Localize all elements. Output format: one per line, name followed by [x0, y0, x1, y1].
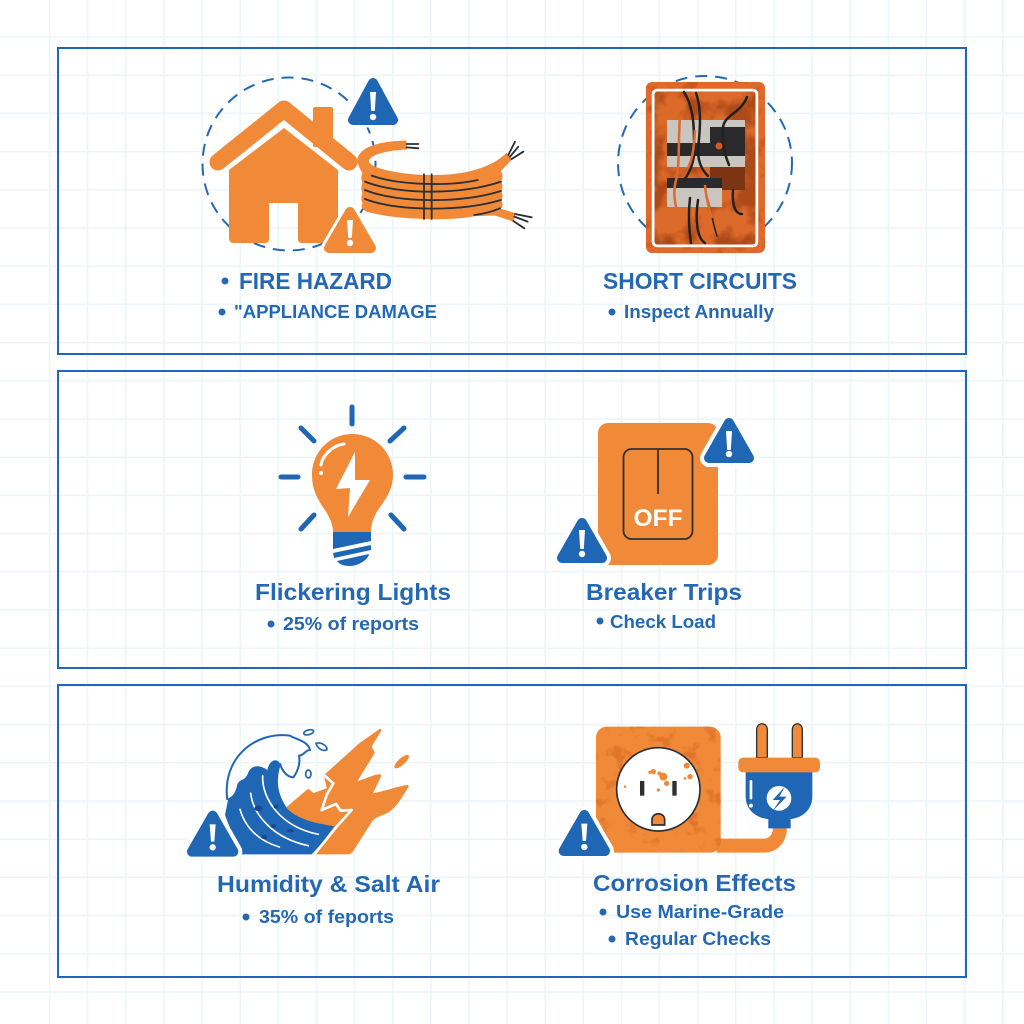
panel: warning signs [58, 371, 966, 668]
icon: tripped breaker switch [562, 423, 749, 565]
heading: humidity and salt air: Humidity & Salt Air [217, 871, 440, 897]
text: inspect annually: Inspect Annually [624, 302, 774, 322]
icon: tripped breaker switch: OFF [634, 505, 682, 532]
panel: environment and corrosion [58, 685, 966, 977]
text: use marine-grade: Use Marine-Grade [616, 902, 784, 922]
text: 35% of reports: 35% of feports [259, 907, 394, 927]
heading: corrosion effects: Corrosion Effects [593, 870, 796, 896]
text: 25% of reports: 25% of reports [283, 614, 419, 634]
icon: flickering light bulb [281, 407, 424, 566]
icon: coiled wire [358, 141, 532, 228]
icon: warning bottom left [562, 523, 602, 558]
icon: corroded breaker panel [618, 76, 792, 253]
heading: fire hazard: FIRE HAZARD [239, 268, 392, 294]
panel: wiring hazards [58, 48, 966, 354]
icon: wave and corrosion [192, 729, 411, 856]
icon: warning triangle on wave [192, 816, 233, 852]
icon: warning triangle on outlet [564, 815, 605, 851]
text: appliance damage: "APPLIANCE DAMAGE [234, 302, 437, 322]
text: regular checks: Regular Checks [625, 929, 771, 949]
heading: flickering lights: Flickering Lights [255, 579, 451, 605]
heading: short circuits: SHORT CIRCUITS [603, 268, 797, 294]
icon: orange warning triangle [329, 212, 371, 248]
icon: house with coiled wire and warnings [202, 78, 532, 250]
text: check load: Check Load [610, 612, 716, 632]
icon: warning top right [709, 423, 749, 458]
icon: corroded outlet and plug [564, 724, 820, 853]
heading: breaker trips: Breaker Trips [586, 579, 742, 605]
icon: blue warning triangle [353, 83, 393, 120]
